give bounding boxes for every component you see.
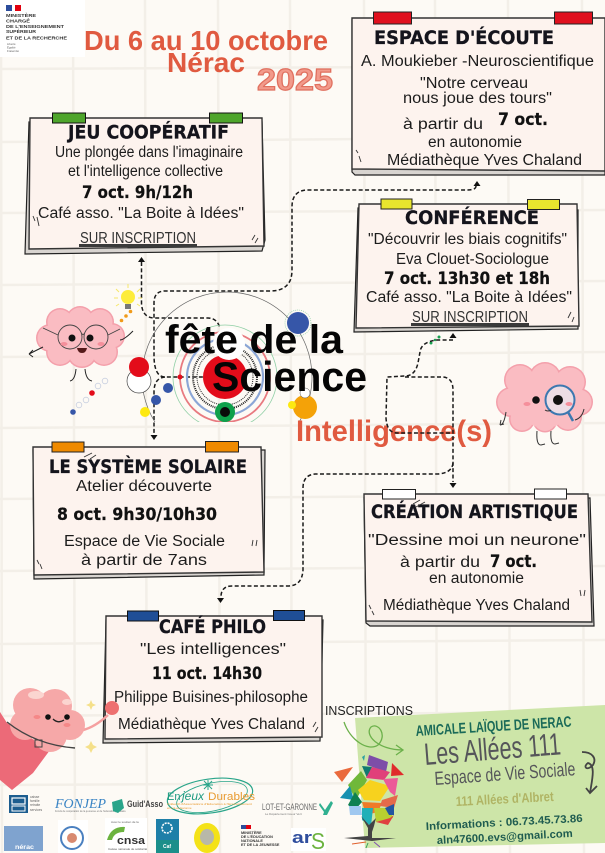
heading: CRÉATION ARTISTIQUE [371,500,578,523]
label: inscriptions: INSCRIPTIONS [325,703,413,718]
place: Espace de Vie Sociale [64,533,225,550]
heading: JEU COOPÉRATIF [66,120,229,144]
age: à partir de 7ans [81,552,207,569]
logo: en jeux durables: en Lot-et-Garonne [167,806,192,810]
heading: CONFÉRENCE [405,206,539,229]
heading: CAFÉ PHILO [159,615,266,638]
speaker: Philippe Buisines-philosophe [114,689,308,706]
logo: ministère de l'enseignement supérieur: MINISTÈRE [6,11,37,19]
date: 7 oct. 9h/12h [82,183,193,203]
start label: à partir du [403,116,483,133]
arrow head: système solaire [150,435,158,440]
tick marks [33,216,258,243]
card: jeu coopératif [25,113,265,254]
heading: LE SYSTÈME SOLAIRE [49,455,247,478]
registration: SUR INSCRIPTION [80,230,196,247]
logo: en jeux durables: jeux [180,789,205,803]
logo: fonjep: Fonds de coopération de la jeunesse et de l'éducation populaire [55,810,126,813]
title: Science: Science [212,353,367,400]
tape right [274,610,304,620]
card: création artistique [364,489,594,626]
address: 111 Allées d'Albret [455,789,554,809]
tick marks [37,453,257,569]
place: Café asso. "La Boite à Idées" [366,289,572,306]
logo: msa [9,795,42,813]
logo: fonjep: FONJEP [54,797,106,812]
dashed connector: système solaire [154,377,165,434]
illustration: solar system [126,292,317,422]
card: conférence [354,199,579,332]
arrow head: jeu coopératif [138,257,145,262]
arrow: curly green [344,722,403,755]
tape right [210,113,242,123]
underline [79,244,197,247]
dashed connector: écoute to centre [154,186,476,377]
logo: ministère de l'éducation nationale: MINISTÈRE [241,830,262,835]
arrow head: café philo [217,598,224,603]
title: fête de la: fête de la [165,318,344,362]
icon: light bulb [114,284,142,322]
logo: en jeux durables: En [167,791,180,803]
logo: en jeux durables: Durables [208,791,256,803]
logo: msa: retraite [30,803,40,807]
description: et l'intelligence collective [68,163,223,180]
mode: en autonomie [429,570,524,587]
phone: Informations : 06.73.45.73.86 [426,813,583,833]
logo: ministère de l'éducation nationale [241,825,280,847]
email: aln47600.evs@gmail.com [437,828,573,847]
title: dates: Du 6 au 10 octobre [84,25,328,56]
logo: cnsa: cnsa [117,835,146,847]
dashed connector: conférence [386,340,453,433]
logo: lot-et-garonne [262,801,333,816]
tape right [206,442,238,452]
tape right [534,489,566,499]
subject: "Découvrir les biais cognitifs" [368,231,567,248]
subject: "Dessine moi un neurone" [368,532,586,549]
place: Médiathèque Yves Chaland [387,152,582,169]
logo: nérac [4,826,43,851]
tape left [52,442,84,452]
dashed connector: création artistique [405,377,453,482]
tape right [554,12,592,24]
start label: à partir du [400,554,480,571]
tick marks [313,722,318,732]
card: espace d'écoute [352,12,605,175]
logo: ministère de l'enseignement supérieur: Fraternité [7,49,19,53]
logo: ars: ar [292,828,312,847]
arrow head: écoute [474,181,480,186]
heading: ESPACE D'ÉCOUTE [374,26,554,49]
place: Médiathèque Yves Chaland [383,597,570,614]
tape right [528,200,560,210]
logo: ministère de l'enseignement supérieur: SUPÉRIEUR [6,27,36,35]
illustration: colourful tree [334,755,404,848]
logo: ars [291,828,326,853]
description: Une plongée dans l'imaginaire [55,144,243,161]
tape left [382,490,416,499]
logo: guid'asso [112,799,163,813]
tape left [381,199,412,209]
date: 7 oct. 13h30 et 18h [384,269,550,289]
logo: msa: caisse [30,795,40,799]
arrow head: création [450,483,456,488]
logo: cnsa: Avec le soutien de la [111,820,139,824]
tape left [52,113,86,123]
logo: lot-et-garonne: Le Département Coeur Vert [265,812,302,816]
tick marks [369,500,585,615]
logo: ministère de l'enseignement supérieur: DE L'ENSEIGNEMENT [6,24,64,30]
place: Café asso. "La Boite à Idées" [38,205,244,222]
mode: en autonomie [428,134,522,151]
logo: ministère de l'éducation nationale: ET DE LA JEUNESSE [241,843,280,847]
arrow: curly dark [582,752,597,793]
logo: ministère de l'enseignement supérieur [0,0,85,57]
logo: ministère de l'enseignement supérieur: CHARGÉ [6,16,31,24]
illustration: caped brain [0,688,119,790]
logo: caf: Caf [163,844,171,850]
logo: yellow emblem [194,823,220,853]
logo: cnsa: Caisse nationale de solidarité [108,847,148,851]
underline [411,323,529,326]
arrow head: conférence [450,333,456,338]
quote: nous joue des tours" [403,90,552,107]
decorative dots trail [70,378,108,415]
dashed connector: café philo [221,463,453,597]
logo: ministère de l'enseignement supérieur: Égalité [7,44,16,50]
illustration: brain with magnifier [496,362,593,445]
logo: fonjep [54,797,126,813]
tick marks [356,150,361,162]
tape left [374,12,412,24]
logo: nérac: nérac [15,844,34,851]
subject: "Les intelligences" [140,641,286,658]
quote: "Notre cerveau [420,75,528,92]
date: 7 oct. [490,552,537,572]
logo: caf [156,819,179,853]
date: 7 oct. [498,110,548,130]
card: système solaire [33,442,265,579]
logo: ministère de l'enseignement supérieur: ET DE LA RECHERCHE [6,36,68,42]
logo: ministère de l'éducation nationale: NATIONALE [241,839,263,843]
subtitle: Atelier découverte [76,478,212,495]
logo: msa: services [30,808,42,812]
place: Médiathèque Yves Chaland [118,716,305,733]
date: 11 oct. 14h30 [152,664,262,684]
logo: ministère de l'enseignement supérieur: Liberté [7,42,16,46]
title: Intelligence(s): Intelligence(s) [296,415,492,448]
logo: en jeux durables: Collectif d'Associations d'Education à l'Environnement [167,802,252,806]
speaker: Eva Clouet-Sociologue [396,251,549,268]
logo: circular badge [58,820,88,853]
dashed connector: jeu coopératif [142,262,220,328]
green dots on connector [430,336,440,344]
title: 2025: 2025 [257,62,333,97]
card: café philo [103,610,323,743]
tick marks [568,312,574,322]
quote [403,75,552,107]
logo: en jeux durables [165,773,256,819]
logo: lot-et-garonne: LOT-ET-GARONNE [262,802,317,812]
speaker: A. Moukieber -Neuroscientifique [361,53,594,70]
date: 8 oct. 9h30/10h30 [57,505,217,525]
title: Nérac: Nérac [167,47,245,78]
logo: ministère de l'éducation nationale: DE L'ÉDUCATION [241,834,273,839]
logo: cnsa [105,818,148,853]
panel: amicale laïque [355,705,605,848]
description [55,144,243,180]
tape left [128,611,158,621]
registration: SUR INSCRIPTION [412,309,528,326]
logo: guid'asso: Guid'Asso [127,799,163,810]
logo: msa: famille [30,799,40,803]
illustration: brain with glasses [29,306,133,381]
